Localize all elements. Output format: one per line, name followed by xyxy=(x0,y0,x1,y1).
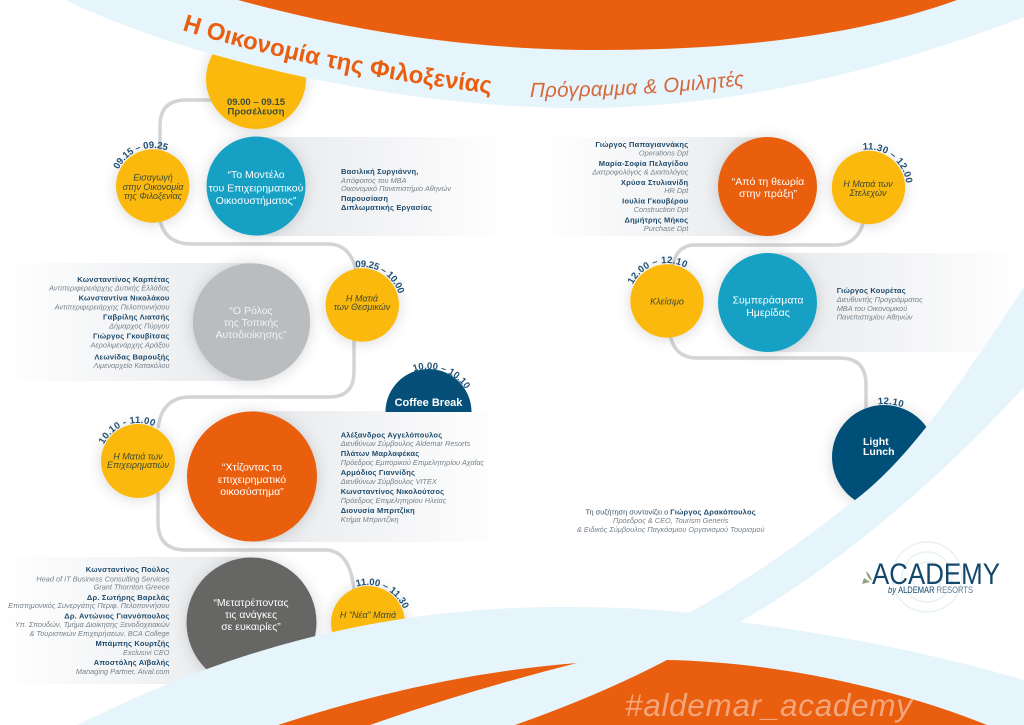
label: Χτίζοντας xyxy=(218,462,286,498)
label: Το Μοντέλο: “Το Μοντέλο xyxy=(227,169,285,181)
top light blue band xyxy=(65,0,1024,108)
speakers: Ο Ρόλος: Αερολιμενάρχης Αράξου xyxy=(90,340,170,350)
speakers: Συμπεράσματα: MBA του Οικονομικού xyxy=(837,304,907,313)
time: 12.00 – 12.10: 12.00 – 12.10 xyxy=(628,256,688,284)
circle: Η Ματιά των Επιχειρηματιών xyxy=(101,424,175,498)
speakers: Συμπεράσματα: Διευθυντής Προγράμματος xyxy=(836,295,923,304)
speakers: Χτίζοντας: Αρμόδιος Γιαννίδης xyxy=(341,468,415,477)
label: Coffee Break: Coffee Break xyxy=(395,397,463,409)
timeline connectors xyxy=(158,100,866,590)
speakers: Χτίζοντας: Διευθύνων Σύμβουλος Aldemar Resorts xyxy=(340,439,471,448)
time: 09.25 – 10.00: 09.25 – 10.00 xyxy=(356,260,404,293)
speakers: Μετατρέποντας: Δρ. Σωτήρης Βαρελάς xyxy=(87,593,170,602)
circle: Μετατρέποντας xyxy=(186,558,316,688)
speakers: Μετατρέποντας: Υπ. Σπουδών, Τμήμα Διοίκησης Ξενοδοχειακών xyxy=(15,620,170,629)
label: Νέα Ματιά: Η “Νέα” Ματιά xyxy=(340,610,397,620)
label: Προσέλευση xyxy=(227,97,286,118)
speakers: Χτίζοντας: Κτήμα Μπριντζίκη xyxy=(341,515,399,524)
label: Επιχειρηματιών xyxy=(107,452,169,470)
circle: Προσέλευση xyxy=(206,29,306,129)
speakers: Χτίζοντας: Πλάτων Μαρλαφέκας xyxy=(341,449,419,458)
speakers: Το Μοντέλο: Βασιλική Συργιάννη, xyxy=(341,167,419,176)
label: Συμπεράσματα xyxy=(733,294,803,319)
speakers: Μετατρέποντας: Αποστόλης Αϊβαλής xyxy=(94,658,170,667)
speakers: Από τη θεωρία: Construction Dpt xyxy=(634,205,689,214)
circle: Ο Ρόλος xyxy=(193,263,310,381)
bottom orange stripe xyxy=(278,663,577,725)
speakers: Μετατρέποντας: Μπάμπης Κουρτζής xyxy=(95,639,170,648)
semicircle: Coffee Break xyxy=(386,369,472,412)
label: Light Lunch xyxy=(863,436,894,458)
speakers: Μετατρέποντας: Grant Thornton Greece xyxy=(94,582,170,592)
label: Στελεχών: Η Ματιά των xyxy=(843,179,893,189)
panel: speaker band Μετατρέποντας xyxy=(0,557,251,684)
moderator note: Τη συζήτηση συντονίζει ο Γιώργος Δρακόπουλος xyxy=(586,508,756,516)
speakers: Χτίζοντας: Πρόεδρος Εμπορικού Επιμελητηρίου Αχαΐας xyxy=(341,458,485,467)
speakers: Μετατρέποντας: Κωνσταντίνος Πούλος xyxy=(86,565,170,574)
label: Θεσμικών: Η Ματιά xyxy=(346,294,379,304)
speakers: Από τη θεωρία: Χρύσα Στυλιανίδη xyxy=(621,178,689,187)
logo: Academy by Aldemar Resorts xyxy=(862,542,1000,612)
speakers: Χτίζοντας: Πρόεδρος Επιμελητηρίου Ηλείας xyxy=(341,496,447,505)
speakers: Ο Ρόλος: Κωνσταντίνος Καρπέτας xyxy=(77,275,170,284)
label: Από τη θεωρία: “Από τη θεωρία xyxy=(732,176,804,188)
label: Το Μοντέλο: Οικοσυστήματος” xyxy=(216,195,297,207)
label: Προσέλευση: Προσέλευση xyxy=(228,106,285,118)
label: Στελεχών: Στελεχών xyxy=(848,188,887,198)
label: Ο Ρόλος: Αυτοδιοίκησης” xyxy=(216,329,287,341)
speakers: Το Μοντέλο: Διπλωματικής Εργασίας xyxy=(341,203,432,212)
label: Μετατρέποντας: σε ευκαιρίες” xyxy=(221,621,281,633)
label: Μετατρέποντας: “Μετατρέποντας xyxy=(213,597,289,609)
label: Μετατρέποντας: τις ανάγκες xyxy=(225,609,277,621)
moderator note xyxy=(577,508,764,534)
label: Επιχειρηματιών: Η Ματιά των xyxy=(113,452,163,462)
bottom light blue shape xyxy=(77,287,1024,725)
panel: speaker band Συμπεράσματα xyxy=(768,253,1024,352)
logo: Academy by Aldemar Resorts: by ALDEMAR RESORTS xyxy=(888,585,973,596)
moderator note: & Ειδικός Σύμβουλος Παγκόσμιου Οργανισμού Τουρισμού xyxy=(577,525,764,534)
speakers: Χτίζοντας: Κωνσταντίνος Νικολούτσος xyxy=(341,487,444,496)
circle: Από τη θεωρία xyxy=(718,137,817,236)
speakers: Από τη θεωρία: Δημήτρης Μήκος xyxy=(625,216,688,224)
label: Ο Ρόλος: της Τοπικής xyxy=(224,317,278,329)
speakers: Μετατρέποντας: Δρ. Αντώνιος Γιαννόπουλος xyxy=(64,612,170,620)
time: 12.10: 12.10 xyxy=(878,398,904,407)
label: Χτίζοντας: οικοσύστημα” xyxy=(220,486,284,498)
label: Προσέλευση: 09.00 – 09.15 xyxy=(227,97,286,108)
speakers: Από τη θεωρία: Διατροφολόγος & Διαιτολόγος xyxy=(591,168,689,176)
speakers: Μετατρέποντας: & Τουριστικών Επιχειρήσεων, BCA College xyxy=(29,629,170,638)
label: Εισαγωγή: της Φιλοξενίας xyxy=(124,191,183,201)
speakers: Από τη θεωρία: Μαρία-Σοφία Πελαγίδου xyxy=(599,159,689,168)
speakers: Ο Ρόλος: Δήμαρχος Πύργου xyxy=(108,322,170,330)
subtitle: Πρόγραμμα & Ομιλητές xyxy=(530,70,744,102)
speakers: Συμπεράσματα xyxy=(836,286,923,322)
label: Από τη θεωρία: στην πράξη” xyxy=(739,188,797,200)
circle: Η Ματιά των Στελεχών xyxy=(832,151,905,224)
speakers: Ο Ρόλος: Αντιπεριφερειάρχης Δυτικής Ελλάδας xyxy=(48,284,170,292)
label: Θεσμικών: των Θεσμικών xyxy=(334,302,391,312)
label: Light Lunch: Lunch xyxy=(863,446,894,458)
label: Χτίζοντας: “Χτίζοντας το xyxy=(222,462,282,474)
hashtag: #aldemar_academy xyxy=(625,687,914,723)
speakers: Από τη θεωρία: Purchase Dpt xyxy=(644,224,689,233)
label: Θεσμικών xyxy=(334,294,391,312)
label: Στελεχών xyxy=(843,179,893,198)
circle: Η Ματιά των Θεσμικών xyxy=(326,268,399,342)
speakers: Το Μοντέλο: Οικονομικό Πανεπιστήμιο Αθηνών xyxy=(341,184,451,193)
label: Συμπεράσματα: Ημερίδας xyxy=(746,307,790,319)
label: Από τη θεωρία xyxy=(732,176,804,200)
speakers: Συμπεράσματα: Πανεπιστημίου Αθηνών xyxy=(837,312,913,322)
label: Εισαγωγή xyxy=(123,172,184,201)
label: Το Μοντέλο: του Επιχειρηματικού xyxy=(209,182,304,194)
speakers: Από τη θεωρία: Ιουλία Γκουβέρου xyxy=(622,196,689,206)
label: Κλείσιμο: Κλείσιμο xyxy=(650,296,684,306)
circle: Κλείσιμο xyxy=(630,264,704,338)
speakers: Από τη θεωρία xyxy=(591,140,689,233)
speakers: Μετατρέποντας: Επιστημονικός Συνεργάτης Περιφ. Πελοποννήσου xyxy=(8,601,170,610)
speakers: Ο Ρόλος: Γαβρίλης Λιατσής xyxy=(103,312,170,322)
speakers: Μετατρέποντας: Exclusivi CEO xyxy=(123,648,170,657)
circle: Η Νέα Ματιά xyxy=(331,586,405,660)
label: Χτίζοντας: επιχειρηματικό xyxy=(218,474,286,486)
speakers: Ο Ρόλος: Λεωνίδας Βαρουξής xyxy=(94,352,170,362)
top orange shape xyxy=(238,0,957,50)
label: Εισαγωγή: στην Οικονομία xyxy=(123,182,184,192)
moderator note: Πρόεδρος & CEO, Tourism Generis xyxy=(613,516,729,525)
panel: speaker band Χτίζοντας xyxy=(252,411,506,542)
time: 10.10 - 11.00: 10.10 - 11.00 xyxy=(99,416,156,444)
speakers: Το Μοντέλο xyxy=(340,167,451,212)
label: Ο Ρόλος: “Ο Ρόλος xyxy=(229,305,273,317)
label: Το Μοντέλο xyxy=(209,169,304,207)
bottom orange shape xyxy=(515,660,987,725)
circle: Συμπεράσματα xyxy=(718,253,817,352)
speakers: Από τη θεωρία: HR Dpt xyxy=(664,186,689,195)
label: Επιχειρηματιών: Επιχειρηματιών xyxy=(107,460,169,470)
speakers: Συμπεράσματα: Γιώργος Κουρέτας xyxy=(837,286,906,295)
label: Συμπεράσματα: Συμπεράσματα xyxy=(733,294,803,306)
speakers: Χτίζοντας xyxy=(340,430,485,524)
time: 11.30 – 12.00: 11.30 – 12.00 xyxy=(863,143,912,182)
speakers: Ο Ρόλος: Κωνσταντίνα Νικολάκου xyxy=(79,294,170,302)
time: 09.15 – 09.25: 09.15 – 09.25 xyxy=(114,141,168,168)
label: Εισαγωγή: Εισαγωγή xyxy=(133,172,173,182)
time: 10.00 – 10.10: 10.00 – 10.10 xyxy=(412,362,470,388)
speakers: Χτίζοντας: Αλέξανδρος Αγγελόπουλος xyxy=(341,430,442,440)
speakers: Ο Ρόλος xyxy=(48,275,170,370)
title: Η Οικονομία της Φιλοξενίας xyxy=(183,14,492,98)
speakers: Από τη θεωρία: Operations Dpt xyxy=(639,148,689,158)
circle: Το Μοντέλο xyxy=(206,136,306,236)
speakers: Μετατρέποντας: Head of IT Business Consulting Services xyxy=(36,574,170,584)
speakers: Το Μοντέλο: Απόφοιτος του ΜΒΑ xyxy=(340,176,407,185)
speakers: Χτίζοντας: Διευθύνων Σύμβουλος VITEX xyxy=(340,477,438,486)
panel: speaker band Από τη θεωρία xyxy=(540,137,768,236)
panel: speaker band Ο Ρόλος xyxy=(0,263,251,381)
label: Light Lunch: Light xyxy=(863,436,889,448)
speakers: Ο Ρόλος: Αντιπεριφερειάρχης Πελοποννήσου xyxy=(54,302,170,312)
logo: Academy by Aldemar Resorts: ACADEMY xyxy=(872,558,1000,591)
panel: speaker band Το Μοντέλο xyxy=(256,137,510,236)
speakers: Χτίζοντας: Διονυσία Μπριτζίκη xyxy=(341,506,415,515)
speakers: Μετατρέποντας: Managing Partner, Aival.com xyxy=(76,667,170,676)
speakers: Ο Ρόλος: Λιμεναρχείο Κατακόλου xyxy=(93,361,170,370)
speakers: Ο Ρόλος: Γιώργος Γκουβίτσας xyxy=(93,332,170,340)
circle: Εισαγωγή xyxy=(116,149,189,223)
label: Μετατρέποντας xyxy=(213,597,289,633)
time: 11.00 – 11.30: 11.00 – 11.30 xyxy=(356,578,409,608)
circle: Χτίζοντας xyxy=(187,412,317,542)
circle: Light Lunch xyxy=(832,405,936,509)
label: Ο Ρόλος xyxy=(216,305,287,341)
speakers: Από τη θεωρία: Γιώργος Παπαγιαννάκης xyxy=(595,140,688,149)
speakers: Το Μοντέλο: Παρουσίαση xyxy=(341,194,388,203)
speakers: Μετατρέποντας xyxy=(8,565,170,676)
